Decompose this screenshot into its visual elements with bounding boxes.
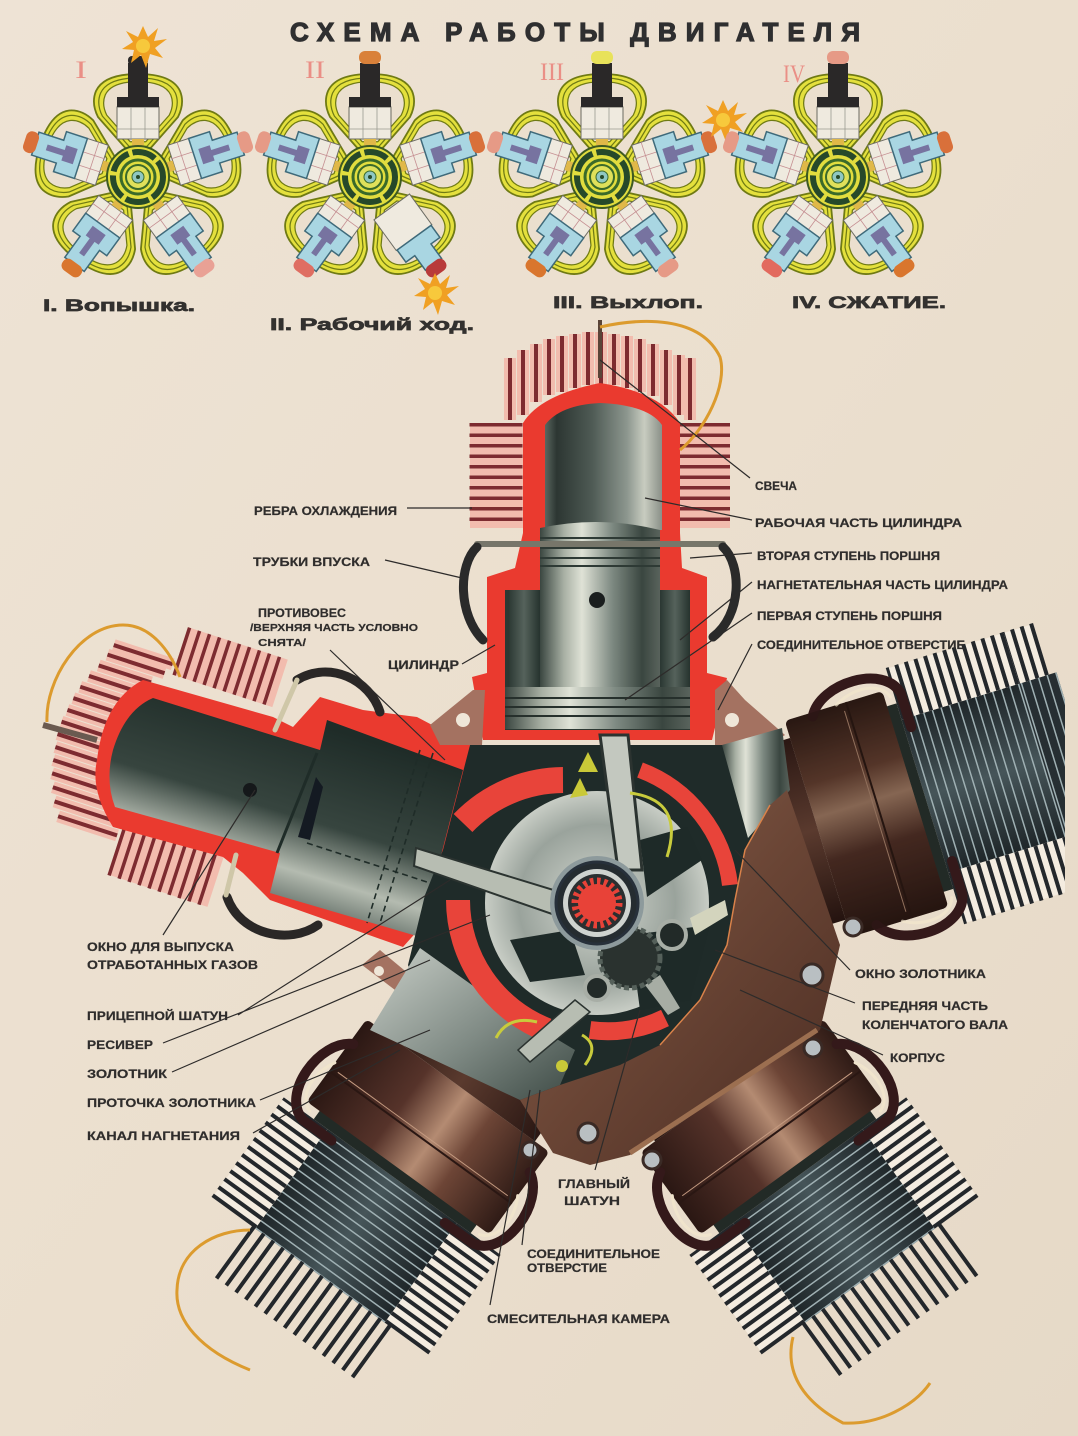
- left cylinder red body: [95, 680, 470, 947]
- left cylinder fins: [21, 599, 288, 907]
- upper piston stage: [540, 522, 660, 690]
- label: counterweight: СНЯТА/: [258, 638, 306, 649]
- roman numeral I: I: [75, 57, 87, 84]
- cylinder: top cutaway: [463, 332, 736, 740]
- master connecting rod: [600, 735, 642, 870]
- label: intake tubes: ТРУБКИ ВПУСКА: [253, 555, 370, 569]
- label: connecting hole: СОЕДИНИТЕЛЬНОЕ ОТВЕРСТИЕ: [757, 638, 965, 652]
- spark plug left: [43, 725, 97, 740]
- crankcase gray wedge: lower left: [370, 948, 575, 1100]
- cylinder: right exterior: [784, 623, 1065, 940]
- lower piston rings: [505, 698, 690, 716]
- label: second piston stage: ВТОРАЯ СТУПЕНЬ ПОРШНЯ: [757, 549, 940, 563]
- label: master rod: [558, 1176, 630, 1208]
- flange holes: [374, 713, 739, 976]
- piston step edge: [277, 753, 317, 853]
- bolts: [522, 918, 862, 1169]
- label: cylinder: ЦИЛИНДР: [388, 658, 459, 672]
- label: spark plug: СВЕЧА: [755, 479, 797, 493]
- dark patches on disc: [510, 827, 710, 1010]
- crankcase gray wedge: upper right: [722, 728, 790, 838]
- upper bore: [545, 403, 662, 530]
- label: connecting hole lower: ОТВЕРСТИЕ: [527, 1261, 607, 1275]
- label: receiver: РЕСИВЕР: [87, 1038, 153, 1052]
- label: counterweight: [250, 606, 418, 649]
- intake tubes: [463, 544, 736, 640]
- label: valve window: ОКНО ЗОЛОТНИКА: [855, 967, 986, 981]
- crankcase dark interior: [408, 745, 775, 1090]
- yellow flow arrows: [496, 793, 671, 1065]
- label: exhaust window: ОТРАБОТАННЫХ ГАЗОВ: [87, 958, 258, 972]
- cylinder: bottom right exterior: [562, 922, 996, 1379]
- exhaust window hole: [243, 783, 257, 797]
- diagram I: flash: [21, 56, 255, 286]
- lower piston stage: [505, 687, 690, 729]
- spark plug top: [598, 320, 602, 378]
- top cylinder fins: [470, 332, 730, 528]
- yellow valve markers: [556, 752, 598, 1072]
- cylinder: left cutaway: [21, 599, 470, 947]
- label: spool valve: ЗОЛОТНИК: [87, 1067, 168, 1081]
- articulated rod bottom left: [518, 1000, 590, 1062]
- left cylinder bore and piston: [109, 698, 463, 937]
- left cylinder intake tubes: [226, 672, 380, 935]
- label: working part: РАБОЧАЯ ЧАСТЬ ЦИЛИНДРА: [755, 516, 962, 530]
- corpus brown housing: [520, 790, 840, 1165]
- label: charge channel: КАНАЛ НАГНЕТАНИЯ: [87, 1129, 240, 1143]
- diagram II: power stroke: [253, 51, 487, 286]
- label: first piston stage: ПЕРВАЯ СТУПЕНЬ ПОРШНЯ: [757, 609, 942, 623]
- crank gear: [600, 928, 660, 988]
- articulated rod left: [414, 848, 560, 914]
- spark wires: [47, 321, 930, 1423]
- roman numeral IV: IV: [783, 61, 805, 88]
- caption IV: IV. СЖАТИЕ.: [792, 293, 946, 312]
- label: cooling fins: РЕБРА ОХЛАЖДЕНИЯ: [254, 504, 397, 518]
- piston pin hole: [589, 592, 605, 608]
- roman numeral III: III: [540, 59, 564, 86]
- central hub: [550, 856, 644, 950]
- flame on diagram II: [414, 273, 459, 315]
- label: connecting hole lower: [527, 1247, 660, 1275]
- upper piston rings: [540, 538, 660, 566]
- caption I: I. Вопышка.: [43, 296, 195, 315]
- label: connecting hole lower: СОЕДИНИТЕЛЬНОЕ: [527, 1247, 660, 1261]
- main engine cross-section: [21, 320, 1078, 1423]
- caption III: III. Выхлоп.: [553, 293, 703, 312]
- cylinder: bottom left exterior: [194, 922, 628, 1379]
- label: mixing chamber: СМЕСИТЕЛЬНАЯ КАМЕРА: [487, 1312, 670, 1326]
- bushing lower: [585, 976, 609, 1000]
- rotor disc: [485, 791, 709, 1015]
- red ring segments: [458, 770, 730, 1031]
- label: charging part: НАГНЕТАТЕЛЬНАЯ ЧАСТЬ ЦИЛИНДРА: [757, 578, 1008, 592]
- label: master rod: ГЛАВНЫЙ: [558, 1176, 630, 1191]
- title: СХЕМА РАБОТЫ ДВИГАТЕЛЯ: [290, 17, 860, 47]
- housing flange strip: [630, 1030, 817, 1153]
- diagram IV: compression: [721, 51, 955, 286]
- articulated rod right: [690, 900, 728, 935]
- top cylinder red body: [472, 383, 727, 740]
- left wall: [508, 590, 540, 690]
- label: crankshaft front: ПЕРЕДНЯЯ ЧАСТЬ: [862, 999, 988, 1013]
- label: housing: КОРПУС: [890, 1051, 945, 1065]
- diagram III: exhaust: [485, 51, 719, 286]
- label: exhaust window: [87, 940, 258, 972]
- articulated rod bottom right: [645, 975, 680, 1015]
- flame on diagram III: [702, 100, 747, 142]
- dashed hidden lines: [307, 750, 433, 923]
- mounting flanges: [362, 680, 785, 990]
- label: master rod: ШАТУН: [564, 1194, 620, 1208]
- leader lines: [163, 360, 883, 1305]
- label: articulated rod: ПРИЦЕПНОЙ ШАТУН: [87, 1008, 228, 1023]
- label: counterweight: ПРОТИВОВЕС: [258, 606, 346, 620]
- label: counterweight: /ВЕРХНЯЯ ЧАСТЬ УСЛОВНО: [250, 623, 418, 634]
- piston slot: [298, 777, 323, 840]
- label: exhaust window: ОКНО ДЛЯ ВЫПУСКА: [87, 940, 234, 954]
- caption II: II. Рабочий ход.: [270, 315, 474, 334]
- roman numeral II: II: [305, 57, 325, 84]
- bushing right: [658, 921, 686, 949]
- flame on diagram I: [122, 26, 167, 68]
- label: valve groove: ПРОТОЧКА ЗОЛОТНИКА: [87, 1096, 256, 1110]
- label: crankshaft front: [862, 999, 1008, 1032]
- housing edge: [660, 805, 770, 1045]
- lower bore: [505, 590, 690, 730]
- label: crankshaft front: КОЛЕНЧАТОГО ВАЛА: [862, 1018, 1008, 1032]
- right wall: [660, 590, 690, 690]
